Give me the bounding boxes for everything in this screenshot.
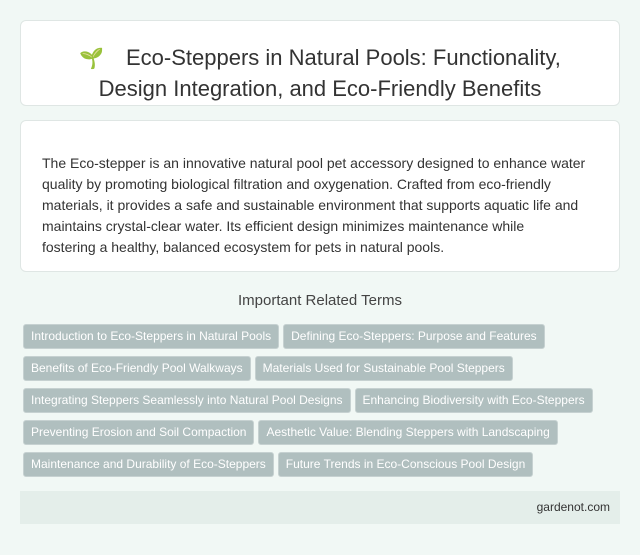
- tags: Benefits of Eco-Friendly Pool Walkways: [31, 361, 243, 375]
- description text: fostering a healthy, balanced ecosystem for pets in natural pools.: [42, 239, 444, 255]
- tags: [23, 324, 593, 477]
- tags: Maintenance and Durability of Eco-Steppers: [31, 457, 266, 471]
- tags: Introduction to Eco-Steppers in Natural Pools: [31, 329, 271, 343]
- tags: Enhancing Biodiversity with Eco-Steppers: [362, 393, 585, 407]
- description text: The Eco-stepper is an innovative natural pool pet accessory designed to enhance water quality by promoting biological filtration and oxygenation. Crafted from eco-friendly materials, it provides a safe and sustainable environment that supports aquatic life and maintains crystal-clear water. Its efficient design minimizes maintenance while: [42, 155, 585, 234]
- title card: [20, 20, 620, 106]
- footer source: gardenot.com: [537, 500, 610, 514]
- tags: Materials Used for Sustainable Pool Steppers: [263, 361, 505, 375]
- tags: Preventing Erosion and Soil Compaction: [31, 425, 246, 439]
- tags: Integrating Steppers Seamlessly into Natural Pool Designs: [31, 393, 342, 407]
- heading: important related terms: Important Related Terms: [238, 292, 402, 309]
- tags: Future Trends in Eco-Conscious Pool Design: [286, 457, 525, 471]
- footer: [20, 491, 620, 524]
- tags: Aesthetic Value: Blending Steppers with Landscaping: [266, 425, 550, 439]
- title: 🌱 Eco-Steppers in Natural Pools: Functionality, Design Integration, and Eco-Friendly Benefits: [79, 45, 561, 101]
- description card: [20, 120, 620, 272]
- tags: Defining Eco-Steppers: Purpose and Features: [291, 329, 537, 343]
